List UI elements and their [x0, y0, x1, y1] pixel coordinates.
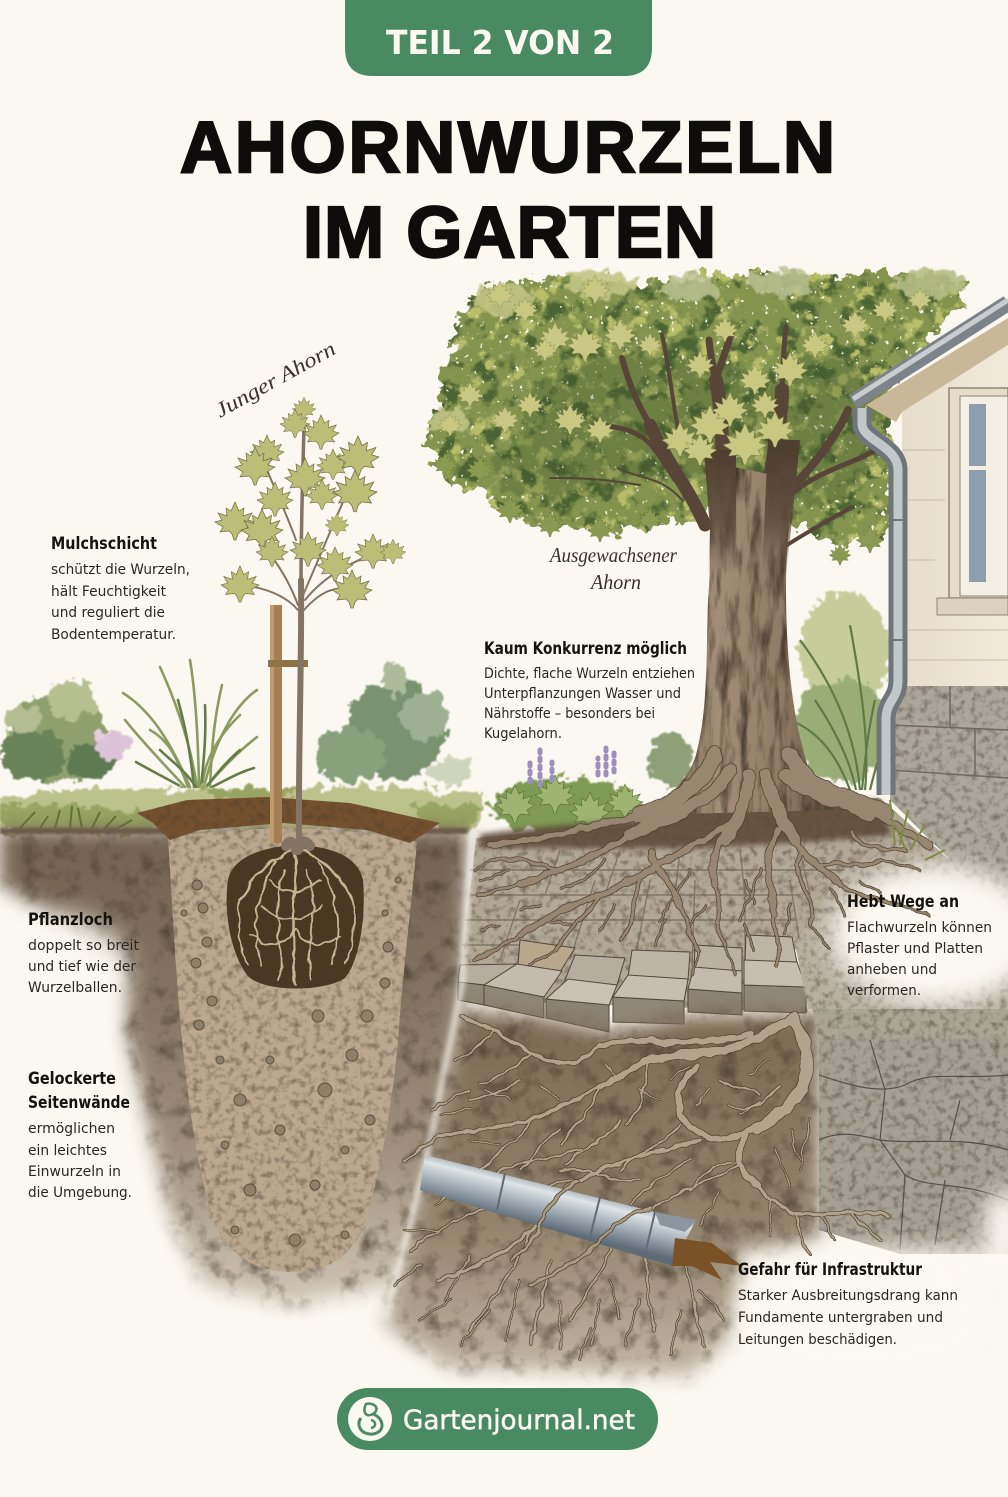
label: Ausgewachsener Ahorn: Ausgewachsener	[548, 543, 678, 567]
text block: Hebt Wege an: Pflaster und Platten	[847, 941, 983, 957]
planting hole	[168, 829, 417, 1272]
soil under the paving	[385, 1010, 820, 1375]
house wall	[902, 345, 1008, 690]
text block: Gefahr für Infrastruktur: Leitungen beschädigen.	[738, 1332, 897, 1348]
label fade behind Gefahr text	[735, 1190, 1008, 1372]
grass clump	[123, 660, 257, 787]
icon: split pipe end with torn root	[672, 1238, 742, 1280]
panel: mature maple with house and damage	[385, 269, 1008, 1375]
text block: Kaum Konkurrenz möglich: Unterpflanzungen Wasser und	[484, 686, 681, 702]
panel: young maple planting section	[0, 397, 486, 1305]
text block: Mulchschicht: hält Feuchtigkeit	[51, 584, 166, 600]
text block: Gelockerte Seitenwände: Seitenwände	[28, 1093, 130, 1112]
icon: brand logo	[348, 1397, 392, 1441]
text block: Hebt Wege an: Hebt Wege an	[847, 892, 959, 911]
canopy	[428, 269, 968, 565]
text block: Kaum Konkurrenz möglich: Kugelahorn.	[484, 726, 562, 742]
crisp upper soil edge	[0, 828, 468, 834]
white gap between sections	[385, 830, 472, 1320]
young maple leaves	[215, 397, 406, 608]
text block: Mulchschicht: und reguliert die	[51, 605, 165, 621]
text block: Hebt Wege an	[847, 892, 992, 999]
broken pipe	[420, 1155, 742, 1280]
roots wrapped over pipe	[510, 1181, 650, 1285]
text block: Mulchschicht: Bodentemperatur.	[51, 627, 176, 643]
label: Ausgewachsener Ahorn: Ahorn	[589, 570, 641, 594]
mid leaves	[433, 348, 907, 565]
title: IM GARTEN	[303, 193, 716, 273]
text block: Kaum Konkurrenz möglich: Kaum Konkurrenz möglich	[484, 639, 687, 658]
upper surface roots	[475, 755, 930, 975]
text block: Gefahr für Infrastruktur	[738, 1260, 958, 1348]
gutter	[853, 300, 1008, 402]
badge: part 2 of 2: TEIL 2 VON 2	[386, 23, 614, 62]
text block: Pflanzloch: Wurzelballen.	[28, 980, 122, 996]
cream fade behind Hebt Wege text	[831, 865, 1008, 1005]
title	[180, 108, 835, 273]
text block: Gefahr für Infrastruktur: Gefahr für Infrastruktur	[738, 1260, 923, 1279]
mulch bed at tree base	[480, 800, 892, 848]
text block: Gelockerte Seitenwände: die Umgebung.	[28, 1185, 132, 1201]
plinth joints	[890, 686, 1008, 778]
hole pebbles	[181, 877, 401, 1246]
text block: Hebt Wege an: anheben und	[847, 962, 937, 978]
stake with tie	[268, 605, 308, 843]
text block: Kaum Konkurrenz möglich: Dichte, flache Wurzeln entziehen	[484, 666, 695, 682]
lawn strip	[0, 787, 486, 832]
text block: Hebt Wege an: verformen.	[847, 983, 921, 999]
branches	[550, 327, 876, 547]
foundation cracks	[819, 1040, 1008, 1250]
canopy interior shadow	[490, 355, 880, 505]
text block: Pflanzloch: und tief wie der	[28, 959, 136, 975]
bush grass blades	[790, 625, 888, 790]
root ball	[227, 845, 364, 989]
foliage over trunk fork	[662, 391, 794, 465]
downpipe	[862, 408, 907, 795]
text block: Kaum Konkurrenz möglich: Nährstoffe – besonders bei	[484, 706, 655, 722]
paving under the tree	[458, 798, 952, 1012]
ground plants with purple flowers	[489, 732, 692, 834]
window	[937, 388, 1008, 615]
slab top	[795, 862, 1008, 1009]
root ball roots	[238, 848, 354, 985]
label: Ausgewachsener Ahorn	[548, 543, 678, 594]
text block: Gelockerte Seitenwände: Einwurzeln in	[28, 1164, 121, 1180]
text block: Mulchschicht	[51, 534, 190, 643]
eaves	[866, 318, 1008, 422]
light fade behind left labels	[0, 913, 130, 1037]
text block: Gelockerte Seitenwände: ermöglichen	[28, 1121, 115, 1137]
paver blocks	[458, 935, 806, 1032]
text block: Hebt Wege an: Flachwurzeln können	[847, 920, 992, 936]
footer brand pill: Gartenjournal.net	[403, 1405, 635, 1436]
small grass tuft	[20, 806, 132, 828]
label: Junger Ahorn: Junger Ahorn	[211, 336, 340, 422]
slab front	[808, 989, 1008, 1038]
text block: Gefahr für Infrastruktur: Starker Ausbreitungsdrang kann	[738, 1288, 958, 1304]
mulch layer	[137, 797, 440, 843]
text block: Gefahr für Infrastruktur: Fundamente untergraben und	[738, 1310, 943, 1326]
wall courses	[902, 450, 1008, 660]
text block: Mulchschicht: schützt die Wurzeln,	[51, 562, 190, 578]
background bushes left	[0, 680, 118, 782]
small grass by wall	[890, 800, 945, 860]
footer brand pill	[337, 1388, 658, 1450]
lawn shading	[0, 788, 482, 832]
fork shading	[704, 440, 800, 575]
text block: Pflanzloch	[28, 910, 139, 996]
bush behind downpipe	[794, 592, 891, 782]
text block: Pflanzloch: Pflanzloch	[28, 910, 113, 929]
stone plinth	[890, 686, 1008, 891]
lower roots beneath paving	[395, 1018, 889, 1360]
text block: Gelockerte Seitenwände: Gelockerte	[28, 1069, 116, 1088]
text block: Mulchschicht: Mulchschicht	[51, 534, 157, 553]
text block: Pflanzloch: doppelt so breit	[28, 938, 139, 954]
background bushes right	[314, 662, 474, 786]
title: AHORNWURZELN	[180, 108, 835, 188]
foundation wall	[819, 1038, 1008, 1254]
soil beside the planting hole	[0, 830, 468, 1305]
canopy base foliage	[428, 272, 968, 545]
bright leaves	[438, 275, 932, 443]
trunk	[640, 465, 835, 815]
text block: Kaum Konkurrenz möglich	[484, 639, 695, 742]
icon: pink flowers	[93, 729, 130, 759]
text block: Gelockerte Seitenwände: ein leichtes	[28, 1143, 107, 1159]
young maple trunk and branches	[240, 425, 378, 850]
paving joints	[462, 850, 860, 975]
badge: part 2 of 2	[345, 0, 652, 76]
pale canopy fringes	[430, 269, 966, 432]
text block: Gelockerte Seitenwände	[28, 1069, 132, 1201]
